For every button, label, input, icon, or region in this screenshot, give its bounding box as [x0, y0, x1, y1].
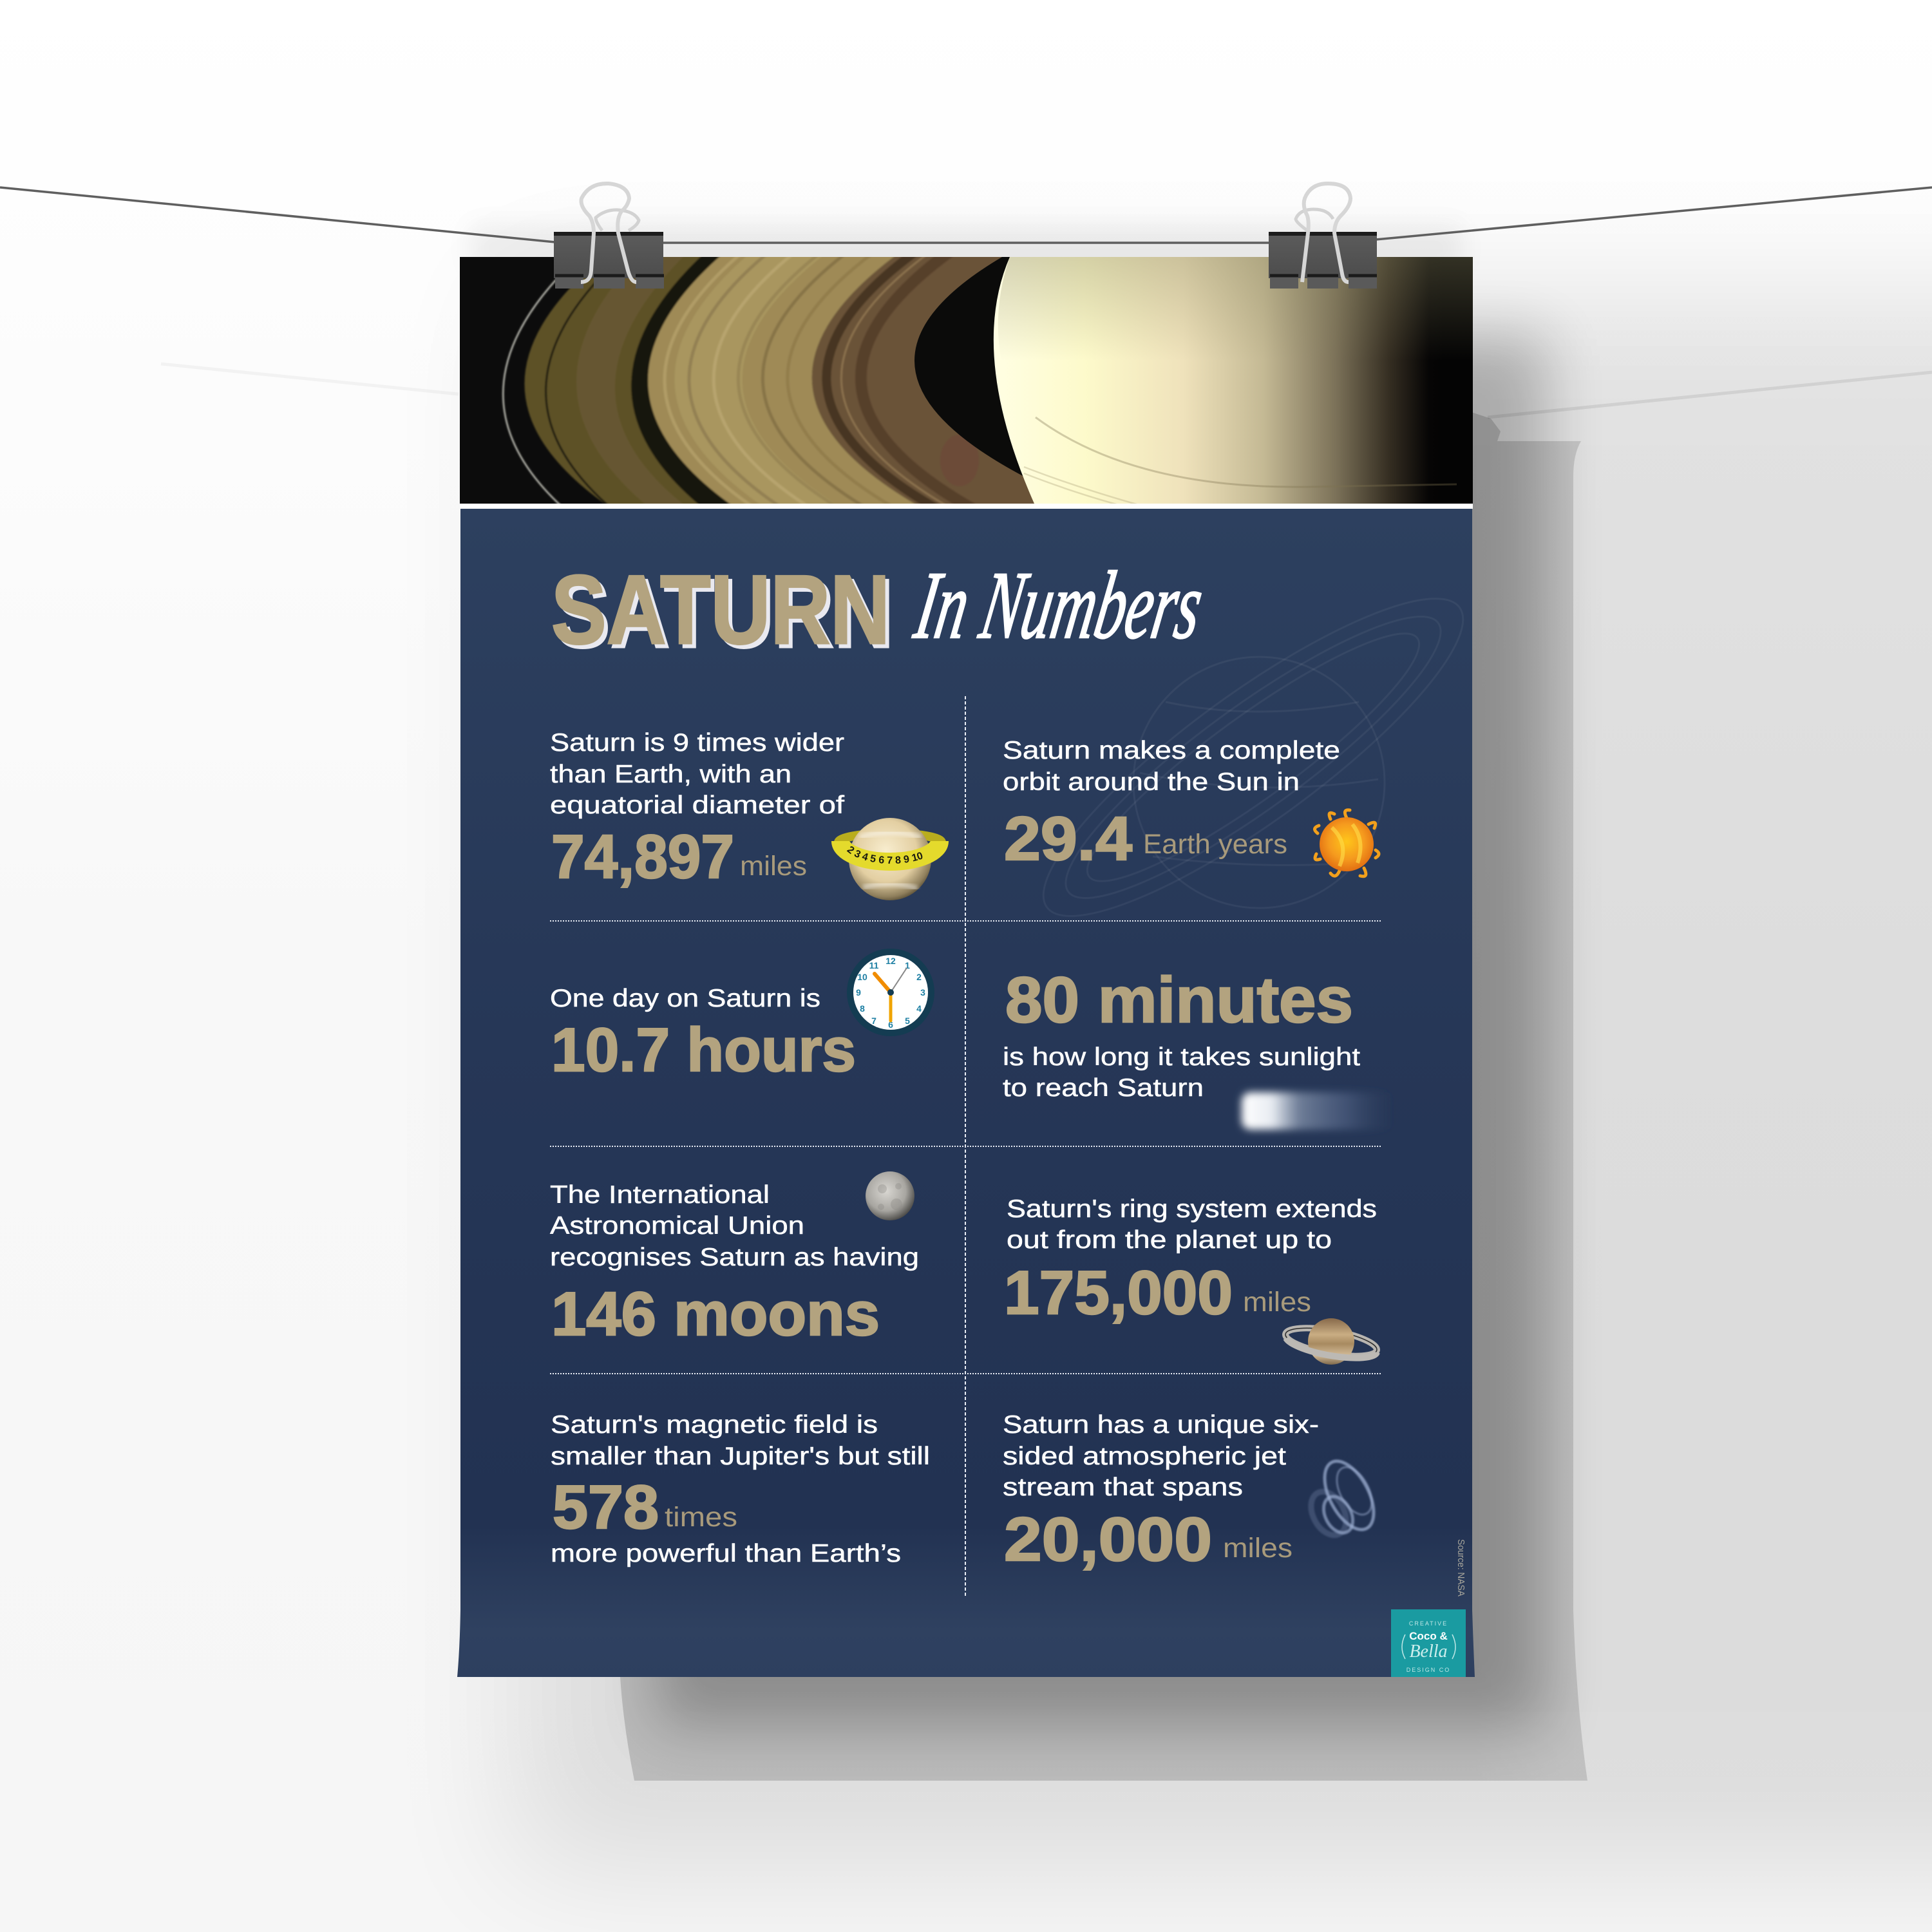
text: more powerful: more powerful than Earth’s	[551, 1540, 901, 1567]
panel: diameter	[550, 729, 949, 900]
panel: moons	[550, 1171, 919, 1349]
number: 10.7 hours: 10.7 hours	[551, 1016, 856, 1084]
icon: clock: 6	[888, 1019, 893, 1030]
ring B	[648, 245, 923, 509]
panel: sunlight	[1003, 964, 1393, 1130]
text: moons description: Astronomical Union	[550, 1212, 804, 1240]
number: 29.4 Earth years: Earth years	[1143, 829, 1287, 860]
text: jet stream description: Saturn has a unique six-	[1003, 1411, 1319, 1439]
text: orbit description: orbit around the Sun in	[1003, 768, 1300, 796]
title word SATURN: SATURN	[555, 559, 894, 668]
text: sunlight description	[1003, 1043, 1360, 1102]
icon: ringed planet	[1283, 1318, 1379, 1365]
logo: Bella	[1409, 1642, 1448, 1662]
panel: jet stream	[1003, 1411, 1384, 1574]
icon: clock: 10	[857, 972, 867, 982]
icon: clock: 4	[916, 1003, 922, 1014]
number: 20,000 miles: miles	[1223, 1533, 1293, 1564]
text: orbit description	[1003, 737, 1340, 796]
text: sunlight description: to reach Saturn	[1003, 1074, 1204, 1102]
icon: clock: 7	[871, 1016, 876, 1026]
icon: clock: 8	[860, 1003, 865, 1014]
icon: vortex	[1304, 1454, 1384, 1541]
icon: clock: 2	[916, 972, 922, 982]
text: diameter description: Saturn is 9 times wider	[550, 729, 844, 757]
number: 80 minutes: 80 minutes	[1005, 964, 1353, 1036]
number: 29.4 Earth years: 29.4	[1004, 804, 1132, 873]
panel: magnetic field	[551, 1411, 930, 1567]
text: jet stream description: sided atmospheric jet	[1003, 1443, 1286, 1470]
white band	[460, 504, 1473, 509]
inner black gap	[914, 245, 1056, 477]
poster	[457, 245, 1475, 1677]
hanging wires	[0, 187, 1932, 243]
text: rings description	[1007, 1195, 1377, 1254]
icon: sun	[1314, 810, 1379, 876]
icon: clock: 5	[905, 1016, 910, 1026]
number: 74,897 miles: 74,897	[551, 822, 734, 891]
icon: clock: 12	[886, 956, 896, 966]
text: diameter description: equatorial diameter of	[550, 791, 844, 819]
text: sunlight description: is how long it takes sunlight	[1003, 1043, 1360, 1071]
binder clip right	[1269, 184, 1377, 289]
icon: clock: 1	[905, 960, 910, 971]
title script In Numbers: In Numbers	[908, 551, 1211, 659]
binder clip left	[554, 184, 664, 289]
panel: day length	[550, 949, 934, 1084]
grid dividers	[550, 696, 1381, 1596]
ring C	[812, 245, 1056, 509]
title	[551, 551, 1211, 668]
ring shadow on planet	[1036, 417, 1457, 487]
logo: Coco &	[1409, 1630, 1448, 1642]
logo: DESIGN CO	[1406, 1667, 1450, 1673]
icon: clock: 9	[856, 987, 861, 998]
text: one day: One day on Saturn is	[550, 985, 820, 1012]
text: jet stream description	[1003, 1411, 1319, 1501]
icon: light beam	[1242, 1092, 1393, 1130]
number: 29.4 Earth years	[1004, 804, 1287, 873]
text: orbit description: Saturn makes a complete	[1003, 737, 1340, 764]
text: diameter description: than Earth, with an	[550, 761, 791, 788]
text: jet stream description: stream that spans	[1003, 1473, 1243, 1501]
icon: planet with measuring tape	[831, 818, 949, 900]
text: magnetic description: Saturn's magnetic field is	[551, 1411, 878, 1439]
number: 146 moons: 146 moons	[551, 1280, 880, 1349]
wire shadows	[161, 364, 1932, 417]
text: moons description: The International	[550, 1181, 770, 1209]
panel: photo of Saturn rings and planet	[460, 245, 1473, 509]
thin outer ring	[501, 278, 562, 504]
number: 175,000 miles: miles	[1243, 1287, 1311, 1318]
text: magnetic description: smaller than Jupiter's but still	[551, 1443, 930, 1470]
ring A	[524, 257, 702, 504]
poster cast shadow shape	[620, 412, 1587, 1781]
icon: clock: 3	[920, 987, 925, 998]
number: 20,000 miles	[1004, 1505, 1293, 1574]
text: rings description: Saturn's ring system extends	[1007, 1195, 1377, 1223]
number: 74,897 miles: miles	[740, 851, 807, 882]
logo	[1391, 1609, 1466, 1677]
number: 175,000 miles: 175,000	[1004, 1258, 1233, 1327]
text: magnetic description	[551, 1411, 930, 1470]
source note: Source: NASA	[1455, 1539, 1466, 1596]
Cassini gap	[631, 245, 737, 509]
number: 578 times	[553, 1473, 737, 1542]
title word SATURN: SATURN	[551, 555, 890, 665]
icon: planet with measuring tape: 2 3 4 5 6 7 8 9 10	[846, 846, 922, 864]
planet body	[994, 257, 1473, 504]
number: 20,000 miles: 20,000	[1004, 1505, 1212, 1574]
panel: rings	[1004, 1195, 1379, 1365]
icon: clock: 11	[869, 960, 879, 971]
text: moons description	[550, 1181, 919, 1271]
logo: CREATIVE	[1409, 1620, 1448, 1627]
icon: moon	[866, 1171, 914, 1220]
text: diameter description	[550, 729, 844, 819]
navy panel	[457, 509, 1475, 1677]
number: 578 times: 578	[553, 1473, 659, 1542]
panel: orbit	[1003, 737, 1379, 876]
text: moons description: recognises Saturn as having	[550, 1244, 919, 1271]
ghost Saturn outline decoration	[1009, 555, 1497, 960]
number: 578 times: times	[665, 1502, 737, 1533]
text: rings description: out from the planet up to	[1007, 1226, 1332, 1254]
icon: clock	[847, 949, 934, 1036]
